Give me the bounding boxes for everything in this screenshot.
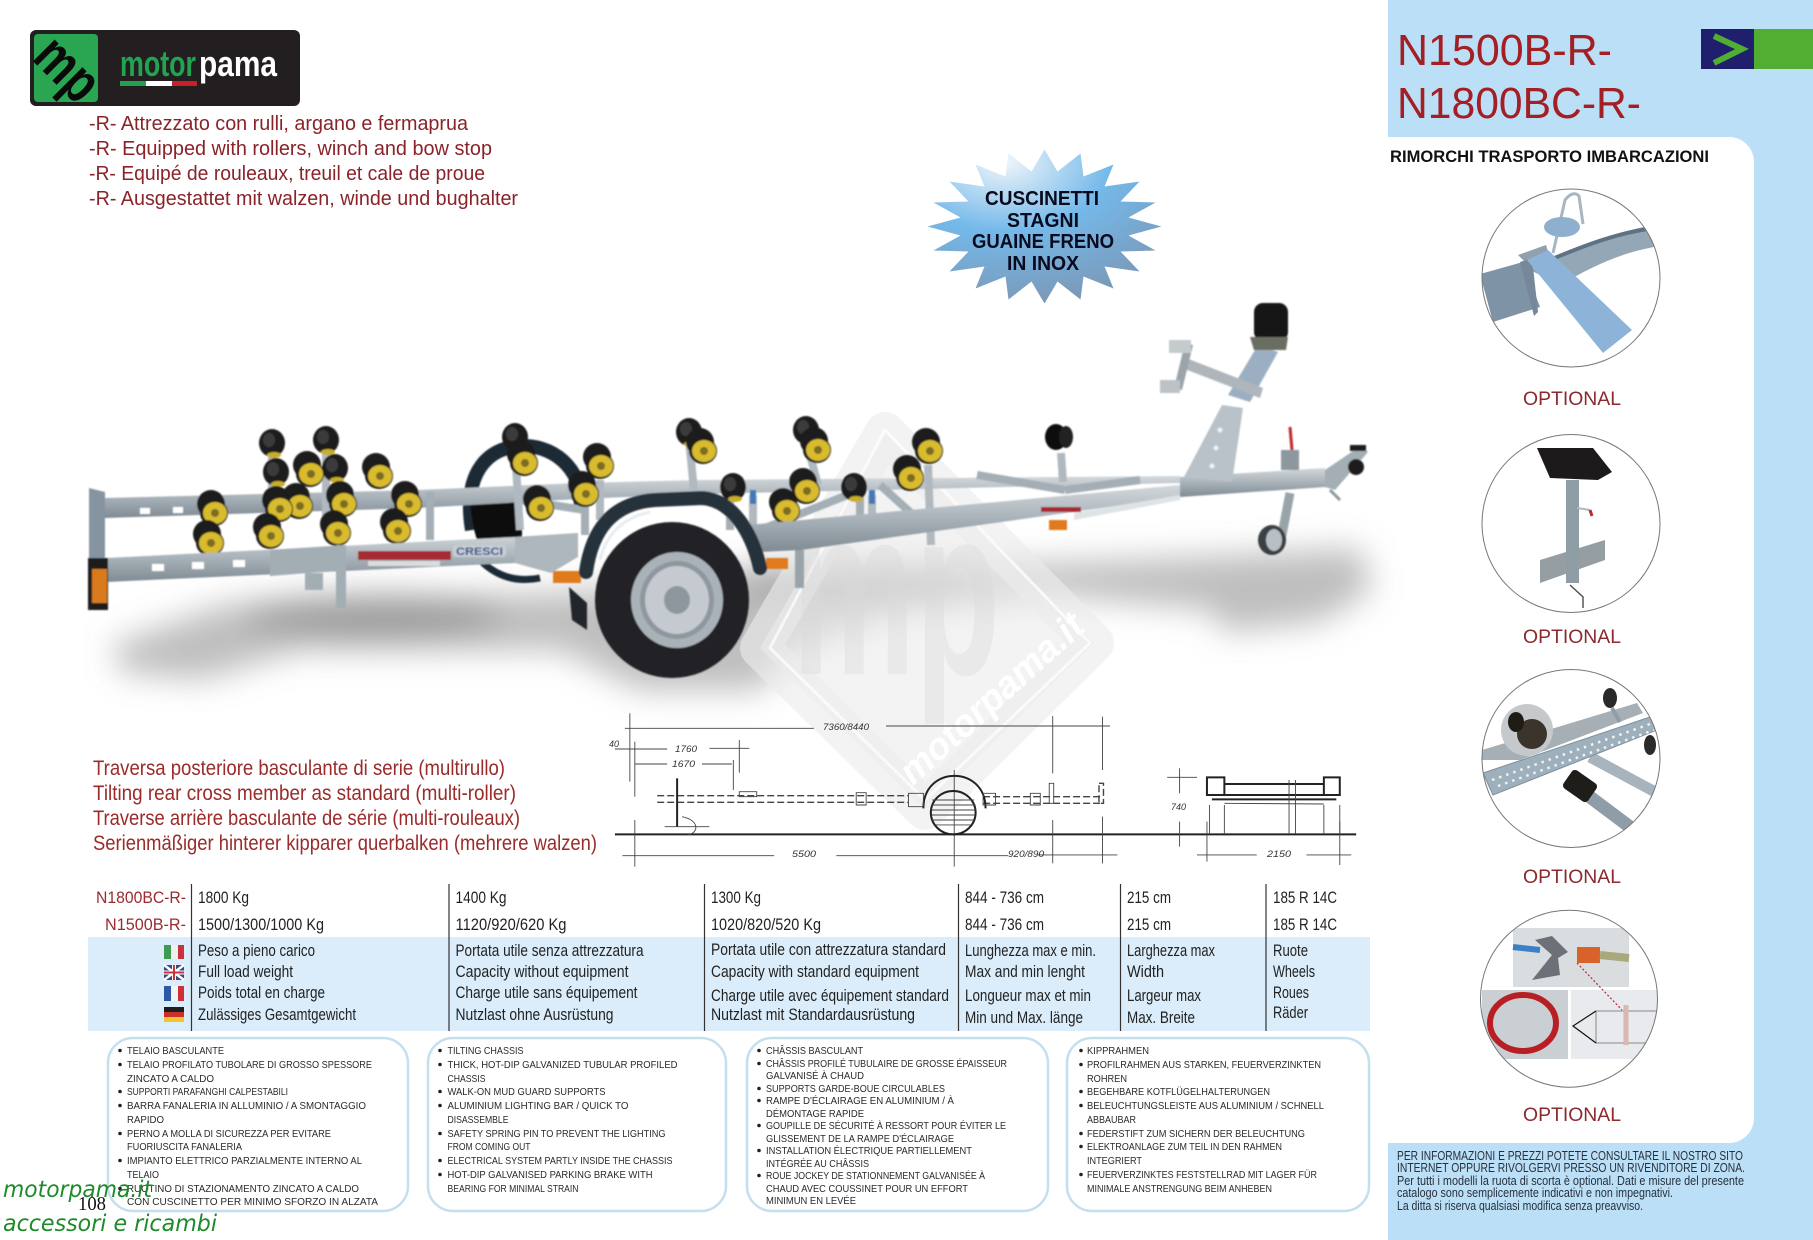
technical drawing with dimensions [609,713,1356,867]
caption: rear cross member: Traversa posteriore basculante di serie (multirullo) [93,757,505,780]
column: capacity without equipment [456,889,644,1024]
icon: section arrow tab [1701,29,1813,69]
panel: German features: ROHREN [1087,1073,1127,1085]
panel: Italian features: FUORIUSCITA FANALERIA [127,1141,242,1153]
footer note: Per tutti i modelli la ruota di scorta è optional. Dati e misure del presente [1397,1174,1744,1188]
bow stop roller [1045,424,1073,450]
page number: 108 [78,1193,106,1215]
panel: Italian features: TELAIO BASCULANTE [127,1045,224,1057]
watermark: motorpama diamond [760,430,1094,810]
panel: German features: FEUERVERZINKTES FESTSTELLRAD MIT LAGER FÜR [1087,1169,1317,1181]
panel: French features: INSTALLATION ÉLECTRIQUE PARTIELLEMENT [766,1144,973,1157]
caption: rear cross member: Traverse arrière basculante de série (multi-rouleaux) [93,807,520,830]
column: length [965,889,1096,1027]
column: wheels: Roues [1273,984,1309,1002]
panel: French features: CHAUD AVEC COUSSINET POUR UN EFFORT [766,1183,969,1195]
panel: Italian features: RAPIDO [127,1114,164,1126]
watermark inner outline [770,430,1090,800]
panel: German features [1067,1038,1369,1211]
caption: rear cross member: Serienmäßiger hinterer kipparer querbalken (mehrere walzen) [93,832,597,855]
column: capacity without equipment: 1400 Kg [456,889,506,907]
starburst callout [928,150,1162,304]
panel: English features: SAFETY SPRING PIN TO PREVENT THE LIGHTING [448,1128,666,1140]
column: width: Largeur max [1127,987,1202,1005]
tricolour underline [120,81,197,86]
column: width: Width [1127,963,1164,981]
dimension labels: 740 [1171,802,1186,812]
panel: English features: BEARING FOR MINIMAL STRAIN [448,1183,578,1195]
panel: French features: INTÉGRÉE AU CHÂSSIS [766,1157,869,1170]
flag: Italy [164,945,184,959]
logo monogram: mp [22,22,114,115]
column: wheels: Wheels [1273,963,1315,981]
bullets [118,1049,122,1190]
column: wheels: 185 R 14C [1273,916,1337,934]
panel: German features: PROFILRAHMEN AUS STARKEN, FEUERVERZINKTEN [1087,1059,1321,1071]
product title: N1500B-R- [1397,26,1612,75]
intro text block: -R- Equipped with rollers, winch and bow stop [89,138,492,160]
side marker lights [553,520,1067,583]
column: capacity with standard equipment [711,889,949,1024]
column: full load weight: 1500/1300/1000 Kg [198,916,324,934]
winch [1250,303,1288,350]
starburst callout: GUAINE FRENO [972,231,1114,253]
model names [96,888,186,934]
panel: Italian features: ZINCATO A CALDO [127,1073,214,1085]
white content panel [1388,137,1754,1143]
dimension labels: 7360/8440 [823,722,869,732]
panel: French features: CHÂSSIS PROFILÉ TUBULAIRE DE GROSSE ÉPAISSEUR [766,1057,1007,1070]
dimension labels: 5500 [792,849,816,859]
option 1: bow ramp photo [1480,189,1660,367]
trailer illustration [88,303,1368,678]
footer note: La ditta si riserva qualsiasi modifica senza preavviso. [1397,1199,1643,1213]
winch column [1228,345,1278,402]
panel: German features: MINIMALE ANSTRENGUNG BEIM ANHEBEN [1087,1183,1272,1195]
watermark letters: mp [792,457,1000,725]
front beam [748,485,1180,552]
column: full load weight: Full load weight [198,963,293,981]
rear lamp [88,558,108,610]
dimension labels: 40 [609,739,619,749]
website watermark text [3,1177,218,1237]
column: capacity with standard equipment: Charge utile avec équipement standard [711,987,949,1005]
column: capacity without equipment: 1120/920/620 Kg [456,916,566,934]
column: width: 215 cm [1127,889,1171,907]
flag: UK [164,965,184,980]
intro text block: -R- Ausgestattet mit walzen, winde und bughalter [89,188,518,210]
logo mark [34,34,98,102]
column: wheels: 185 R 14C [1273,889,1337,907]
mudflap [569,587,587,630]
option 2 label: OPTIONAL [1523,626,1621,648]
panel: German features: KIPPRAHMEN [1087,1045,1149,1057]
column: width: 215 cm [1127,916,1171,934]
panel: English features: HOT-DIP GALVANISED PARKING BRAKE WITH [448,1169,652,1181]
table blue band [88,937,1370,1031]
rear rollers, dark [259,416,867,502]
column: wheels: Ruote [1273,942,1308,960]
column: length: 844 - 736 cm [965,916,1044,934]
panel: Italian features: PERNO A MOLLA DI SICUREZZA PER EVITARE [127,1128,331,1140]
panel: French features: GLISSEMENT DE LA RAMPE D'ÉCLAIRAGE [766,1132,954,1145]
section heading: RIMORCHI TRASPORTO IMBARCAZIONI [1390,147,1709,166]
dimension labels: 920/890 [1008,849,1044,859]
axle bracket [515,533,578,573]
panel: Italian features: BARRA FANALERIA IN ALLUMINIO / A SMONTAGGIO [127,1100,366,1112]
panel: French features: RAMPE D'ÉCLAIRAGE EN ALUMINIUM / À [766,1094,954,1107]
logo: motorpama [22,22,300,115]
column: full load weight: Poids total en charge [198,984,325,1002]
panel: English features: ALUMINIUM LIGHTING BAR / QUICK TO [448,1100,628,1112]
far chassis rail [105,476,1180,518]
trailer ground shadow [112,548,1372,690]
logo wordmark motor: motor [120,43,196,84]
column: width: Larghezza max [1127,942,1216,960]
column: capacity without equipment: Capacity without equipment [456,963,629,981]
panel: English features: ELECTRICAL SYSTEM PARTLY INSIDE THE CHASSIS [448,1155,672,1167]
column: wheels: Räder [1273,1004,1308,1022]
column: full load weight [198,889,356,1024]
roller posts [272,440,1063,545]
jockey clamp handle [1281,427,1299,470]
panel: English features: DISASSEMBLE [448,1114,508,1126]
column: length: Min und Max. länge [965,1009,1083,1027]
starburst callout: IN INOX [1007,253,1080,275]
panel: Italian features: SUPPORTI PARAFANGHI CALPESTABILI [127,1086,288,1098]
panel: German features: BEGEHBARE KOTFLÜGELHALTERUNGEN [1087,1086,1270,1098]
intro text block: -R- Attrezzato con rulli, argano e fermaprua [89,113,469,135]
option 3: walkway photo [1482,670,1660,848]
option 4: wiring kit photo [1480,910,1658,1087]
panel: German features: INTEGRIERT [1087,1155,1142,1167]
dimension labels [609,722,1291,859]
footer note: catalogo sono semplicemente indicativi e non impegnativi. [1397,1186,1673,1200]
bullets [757,1049,761,1177]
bullets [438,1049,442,1176]
panel: English features: CHASSIS [448,1073,486,1085]
column: capacity with standard equipment: Nutzlast mit Standardausrüstung [711,1006,915,1024]
column: capacity without equipment: Nutzlast ohne Ausrüstung [456,1006,614,1024]
column: full load weight: Zulässiges Gesamtgewicht [198,1006,356,1024]
panel: French features: GALVANISÉ À CHAUD [766,1069,864,1082]
model names: N1800BC-R- [96,888,186,907]
specification table [88,884,1370,1031]
right side panel [1388,0,1813,1240]
winch post holes [1210,428,1222,468]
watermark url: motorpama.it [891,604,1094,793]
panel: French features: GOUPILLE DE SÉCURITÉ À RESSORT POUR ÉVITER LE [766,1119,1006,1132]
starburst callout: STAGNI [1007,210,1079,232]
hitch section [1180,468,1325,497]
yellow rollers [193,427,943,556]
coupling [1325,445,1368,500]
column: width [1127,889,1216,1027]
panel: Italian features: TELAIO [127,1169,159,1181]
dimension labels: 1670 [672,759,695,769]
winch cross bar [1160,340,1263,398]
panel: Italian features: TELAIO PROFILATO TUBOLARE DI GROSSO SPESSORE [127,1059,372,1071]
panel: French features [747,1038,1048,1211]
option 4 label: OPTIONAL [1523,1104,1621,1126]
footer note: PER INFORMAZIONI E PREZZI POTETE CONSULTARE IL NOSTRO SITO [1397,1149,1743,1163]
bullets [1079,1049,1083,1176]
upper rail slots [140,507,183,514]
panel: French features: MINIMUN EN LEVÉE [766,1194,856,1207]
wheel [595,522,749,678]
footer note: INTERNET OPPURE RIVOLGERVI PRESSO UN RIVENDITORE DI ZONA. [1397,1161,1745,1175]
panel: English features: THICK, HOT-DIP GALVANIZED TUBULAR PROFILED [448,1059,678,1071]
jockey wheel [1258,493,1290,555]
panel: English features: FROM COMING OUT [448,1141,531,1153]
rear cross bar [89,488,105,558]
flag: Germany [164,1007,184,1022]
flag: France [164,986,184,1001]
column: capacity with standard equipment: 1020/820/520 Kg [711,916,821,934]
tilt bracket [270,545,346,608]
option 3 label: OPTIONAL [1523,866,1621,888]
column: capacity with standard equipment: Portata utile con attrezzatura standard [711,941,946,959]
column: full load weight: 1800 Kg [198,889,249,907]
panel: Italian features: CON CUSCINETTO PER MINIMO SFORZO IN ALZATA [127,1196,378,1208]
intro text block [89,113,518,210]
model names: N1500B-R- [105,915,186,934]
column: capacity with standard equipment: 1300 Kg [711,889,761,907]
caption: rear cross member [93,757,597,855]
website watermark text: accessori e ricambi [3,1211,218,1237]
panel: German features: ABBAUBAR [1087,1114,1136,1126]
panel: French features: ROUE JOCKEY DE STATIONNEMENT GALVANISÉE À [766,1169,985,1182]
column: capacity without equipment: Charge utile sans équipement [456,984,638,1002]
spare wheel [470,446,581,580]
front red label [1041,507,1081,512]
panel: German features: ELEKTROANLAGE ZUM TEIL IN DEN RAHMEN [1087,1141,1282,1153]
column: length: Max and min lenght [965,963,1085,981]
panel: German features: FEDERSTIFT ZUM SICHERN DER BELEUCHTUNG [1087,1128,1305,1140]
small blue rollers [750,490,875,504]
dimension labels: 1760 [675,744,697,754]
website watermark text: motorpama.it [3,1177,153,1203]
product title [1397,26,1641,128]
option 1 label: OPTIONAL [1523,388,1621,410]
panel: Italian features: IMPIANTO ELETTRICO PARZIALMENTE INTERNO AL [127,1155,362,1167]
logo wordmark pama: pama [199,43,278,84]
column: capacity without equipment: Portata utile senza attrezzatura [456,942,644,960]
panel: Italian features [108,1038,408,1211]
panel: French features: SUPPORTS GARDE-BOUE CIRCULABLES [766,1083,945,1095]
column: wheels [1273,889,1337,1022]
starburst callout: CUSCINETTI [985,188,1099,210]
column: length: Longueur max et min [965,987,1091,1005]
panel: English features [428,1038,726,1211]
winch post [1184,405,1243,482]
panel: English features: TILTING CHASSIS [448,1045,524,1057]
cross braces [430,475,1140,540]
panel: French features: CHÂSSIS BASCULANT [766,1044,864,1057]
column: capacity with standard equipment: Capacity with standard equipment [711,963,919,981]
fender [586,498,760,572]
column: length: 844 - 736 cm [965,889,1044,907]
dimension labels: 2150 [1266,849,1291,859]
cresci logo: CRESCI [456,546,503,558]
column: length: Lunghezza max e min. [965,942,1096,960]
footer note [1397,1149,1745,1213]
near rear beam [107,533,578,582]
option 2: support post photo [1482,434,1660,612]
product title: N1800BC-R- [1397,79,1641,128]
panel: French features: DÉMONTAGE RAPIDE [766,1107,864,1120]
underside step [1074,495,1180,520]
front leg [795,550,804,588]
lower rail slots [152,560,245,571]
intro text block: -R- Equipé de rouleaux, treuil et cale de proue [89,163,485,185]
column: width: Max. Breite [1127,1009,1195,1027]
column dividers [192,884,1266,1031]
panel: German features: BELEUCHTUNGSLEISTE AUS ALUMINIUM / SCHNELL [1087,1100,1324,1112]
side labels [358,551,451,566]
panel: English features: WALK-ON MUD GUARD SUPPORTS [448,1086,606,1098]
panel: Italian features: RUOTINO DI STAZIONAMENTO ZINCATO A CALDO [127,1183,359,1195]
column: full load weight: Peso a pieno carico [198,942,315,960]
caption: rear cross member: Tilting rear cross member as standard (multi-roller) [93,782,516,805]
